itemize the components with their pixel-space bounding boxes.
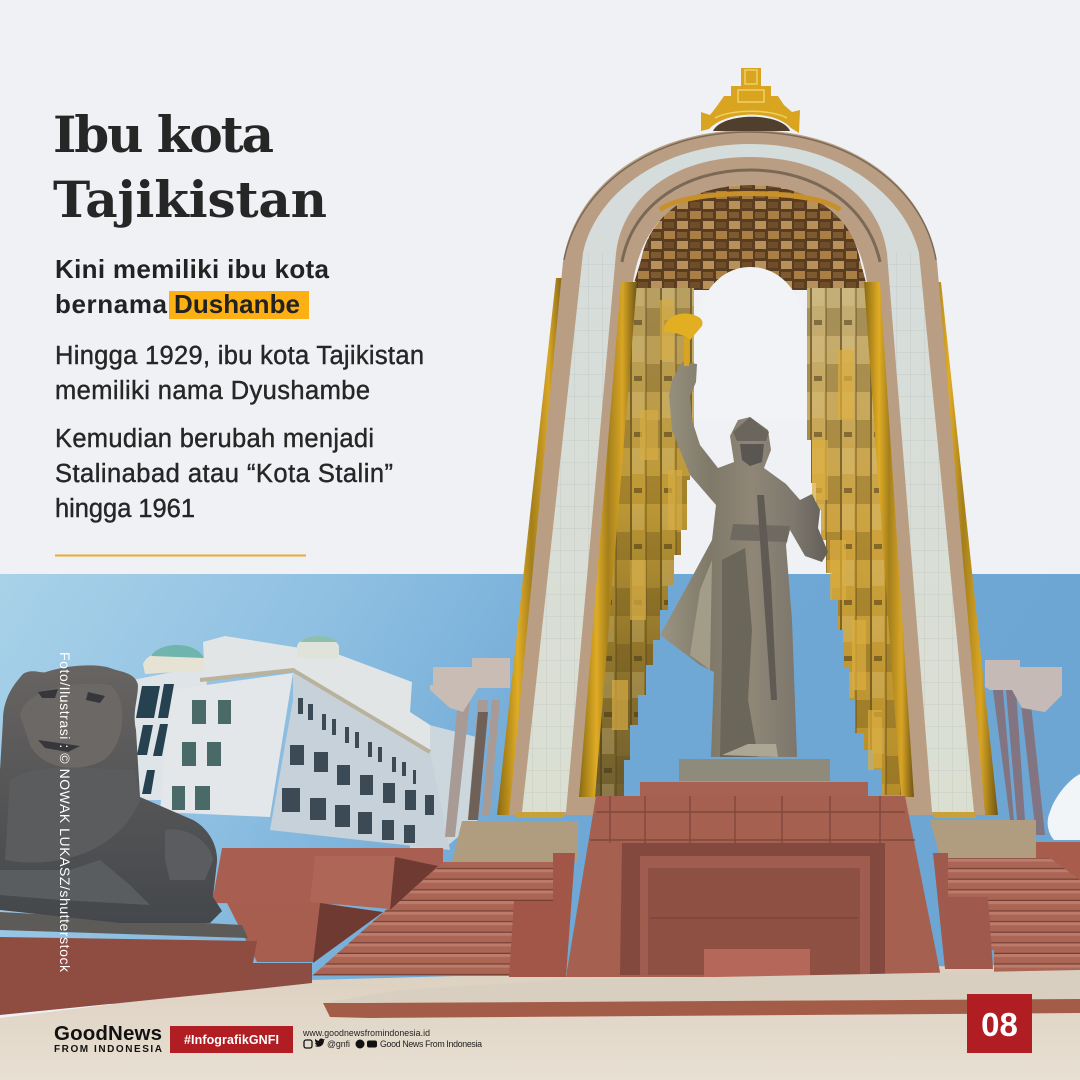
statue robe ornament (757, 495, 777, 700)
pedestal right wing (933, 853, 993, 969)
torch handle (684, 338, 689, 366)
highlight: Dushanbe (169, 291, 309, 319)
right wall accent blocks (812, 350, 882, 770)
pedestal left wing (509, 853, 575, 977)
terrace upper wall (212, 848, 443, 905)
pedestal panel lines (590, 796, 915, 918)
footer links: Good News From Indonesia (380, 1039, 482, 1049)
tan base right (930, 820, 1036, 858)
icon: instagram (304, 1040, 312, 1048)
left golden wall (595, 288, 694, 797)
photo credit: Foto/Ilustrasi : © NOWAK LUKASZ/shutterstock (57, 652, 73, 973)
building: roof storey (203, 636, 430, 760)
building: front windows (172, 700, 231, 810)
slab front (323, 999, 1080, 1018)
title: Tajikistan (53, 170, 327, 229)
pedestal recess frame (620, 843, 885, 975)
crown gold body (701, 68, 800, 133)
footer logo: GoodNews (54, 1022, 162, 1045)
lion pedestal (0, 937, 257, 1015)
building: large dome (143, 648, 209, 674)
inner gold rods left (579, 282, 637, 797)
divider (55, 554, 306, 556)
outer gold rods left (497, 278, 566, 815)
torch fan (664, 314, 702, 340)
lion eyes and mouth (38, 689, 105, 752)
outer gold rods right (928, 282, 998, 815)
hashtag badge: #InfografikGNFI (184, 1033, 279, 1047)
white band of arch (522, 144, 974, 812)
slab top (323, 970, 1080, 1003)
building: side windows (282, 698, 434, 843)
white building (133, 636, 480, 850)
title (53, 105, 327, 229)
building: round tower (133, 665, 207, 800)
crown dome (713, 117, 790, 131)
bottom gold sills (516, 812, 976, 818)
page number badge (967, 994, 1032, 1053)
subheading: Kini memiliki ibu kota (55, 254, 330, 284)
footer logo (54, 1022, 162, 1055)
lion face (20, 684, 122, 768)
torch finial (664, 314, 702, 366)
terrace blocks left (212, 848, 443, 990)
pedestal small box (704, 949, 810, 977)
raised platform slab (323, 970, 1080, 1018)
colonnade right (985, 660, 1062, 835)
paragraph: 1929: Hingga 1929, ibu kota Tajikistan (55, 342, 424, 370)
crown finial (701, 68, 800, 133)
hashtag badge (170, 1026, 293, 1053)
capitals right (985, 660, 1062, 712)
icon: facebook (356, 1040, 364, 1048)
opening in arch (694, 267, 807, 420)
terrace shadow side (390, 857, 438, 910)
lion body (0, 665, 222, 923)
statue face shading (740, 444, 764, 466)
stairs right (948, 858, 1080, 975)
statue crown (733, 417, 769, 441)
paragraph: 1929: memiliki nama Dyushambe (55, 377, 370, 405)
lion mane (5, 768, 140, 862)
statue hem ornament (722, 744, 778, 757)
statue (660, 362, 828, 757)
stairs left (312, 862, 555, 984)
statue body (660, 362, 828, 757)
right golden wall (807, 288, 905, 795)
arch body (509, 130, 985, 815)
footer logo: FROM INDONESIA (54, 1044, 162, 1055)
icon: youtube (367, 1040, 377, 1048)
icon: twitter (315, 1038, 325, 1047)
columns right (993, 690, 1045, 835)
lion statue (0, 665, 222, 923)
left wall accent blocks (612, 300, 682, 730)
terrace lower shadow (313, 903, 383, 963)
page number badge: 08 (981, 1006, 1018, 1043)
pedestal top step (640, 782, 868, 796)
lion haunch highlight (165, 829, 213, 880)
subheading: Dushanbe (174, 289, 300, 319)
building: cornice (200, 670, 430, 752)
cloud (1048, 774, 1080, 840)
right side block (1036, 842, 1080, 880)
paragraph: 1929 (55, 342, 424, 405)
paragraph: Stalinabad (55, 425, 393, 523)
building: side face (270, 668, 450, 850)
terrace middle block (310, 856, 395, 909)
paragraph: Stalinabad: Stalinabad atau “Kota Stalin” (55, 460, 393, 488)
ground pavement (0, 964, 1080, 1080)
footer links: www.goodnewsfromindonesia.id (302, 1028, 430, 1038)
crown highlight (715, 70, 787, 118)
inner gold rods right (864, 282, 914, 797)
statue robe shadow (720, 548, 758, 757)
building: small dome (297, 636, 339, 658)
subheading: bernama (55, 289, 168, 319)
pedestal main block (566, 796, 941, 977)
footer links (302, 1028, 482, 1049)
plinth (679, 759, 830, 781)
statue cape shade (690, 560, 712, 670)
tan base left (452, 821, 578, 862)
paragraph: Stalinabad: hingga 1961 (55, 495, 195, 523)
building: front face (160, 673, 293, 817)
building: rear wing (410, 720, 480, 848)
subheading (55, 254, 330, 319)
lion paw (0, 860, 150, 905)
background: blue sky band (0, 574, 1080, 1004)
arch outer line (564, 132, 936, 260)
terrace lower block (227, 903, 320, 962)
background: light top panel (0, 0, 1080, 575)
footer links: @gnfi (327, 1039, 350, 1049)
terrace foot (248, 963, 312, 990)
building: tower windows (136, 684, 174, 794)
monument arch (497, 130, 998, 818)
panel tile lines (522, 253, 974, 812)
colonnade left (430, 658, 510, 837)
capitals left (430, 658, 510, 712)
paragraph: Stalinabad: Kemudian berubah menjadi (55, 425, 374, 453)
statue belt (730, 524, 790, 542)
columns left (445, 700, 500, 837)
gold niche vault (632, 185, 868, 290)
vault gold rim (660, 194, 840, 210)
granite pedestal (509, 782, 993, 977)
pedestal recess inner (640, 856, 870, 975)
inner arch mouldings (622, 170, 880, 262)
lion base slab (0, 912, 248, 938)
title: Ibu kota (53, 105, 274, 164)
